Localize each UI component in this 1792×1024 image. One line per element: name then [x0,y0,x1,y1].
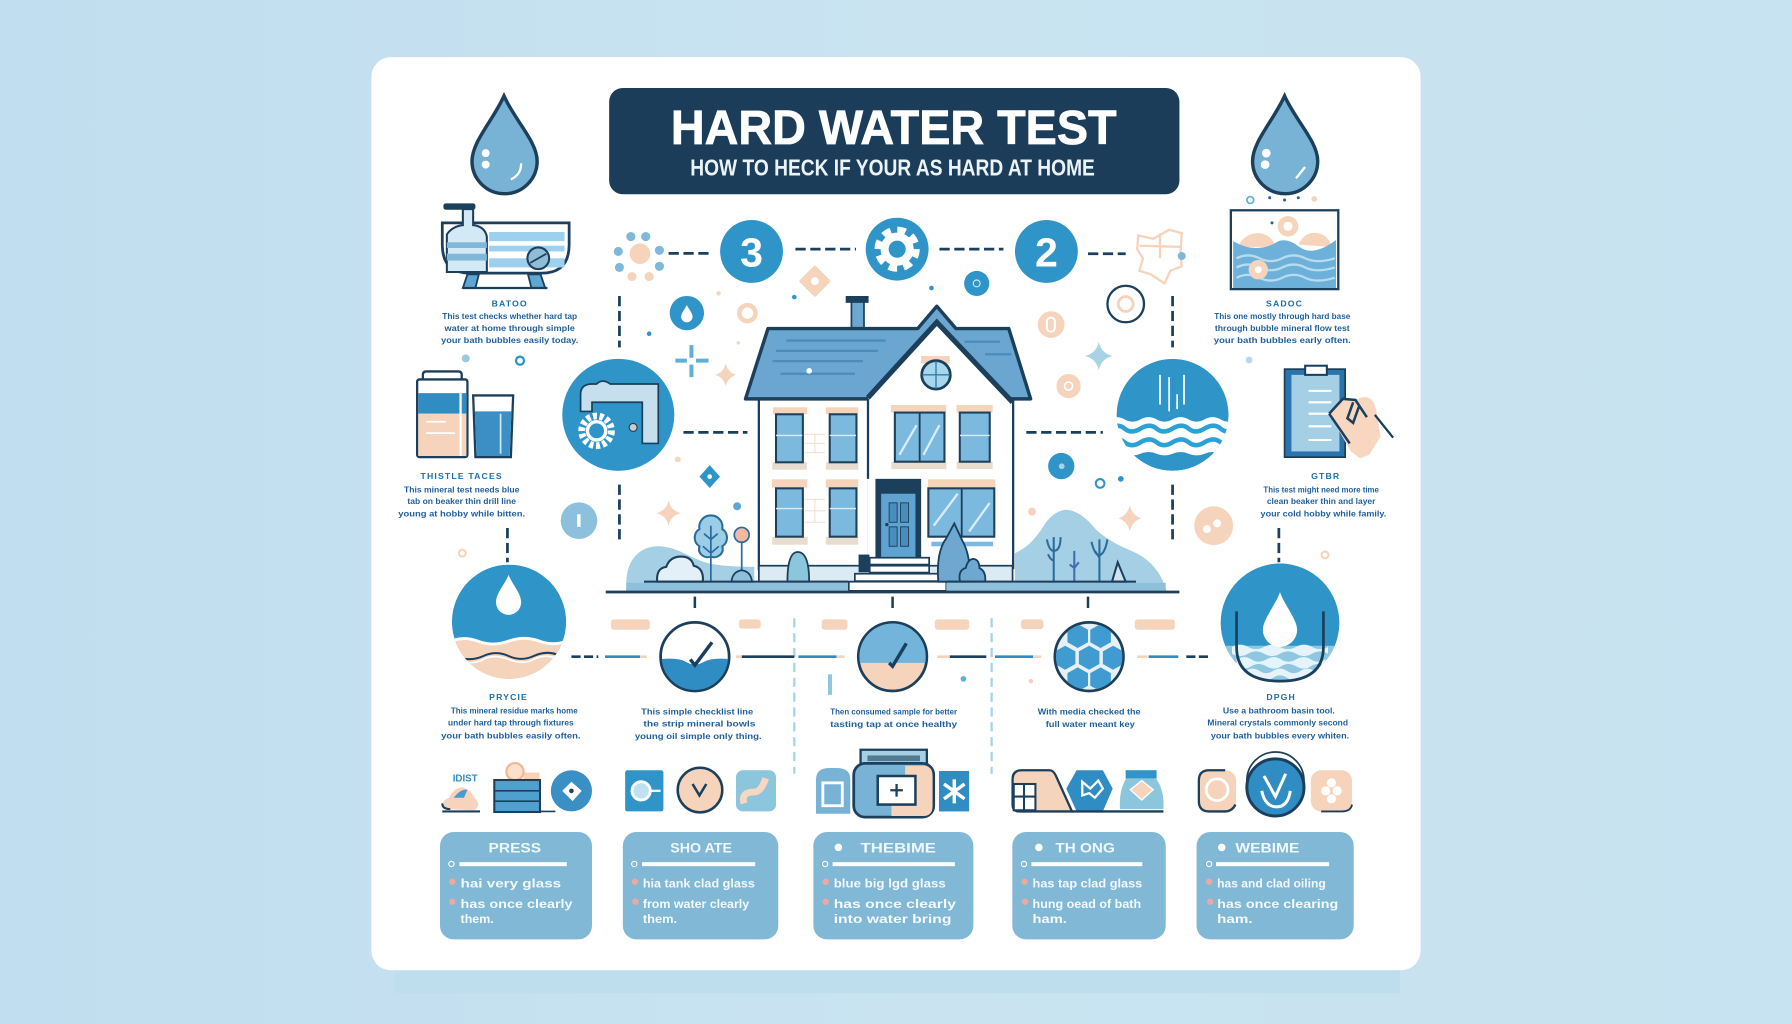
text block: step four: full water meant key [1046,719,1135,729]
icon: check dial half [857,622,928,691]
panel: card four: TH ONG [1055,841,1115,856]
card shadow strip [394,960,1400,993]
text block: middle right: GTBR [1311,471,1340,481]
connector: right vertical lower short [1278,528,1280,562]
icon: drop over peach wave circle [452,564,566,679]
text block: step four [1038,706,1141,729]
icon group: third [816,750,969,817]
tree [695,515,727,582]
foundation [759,566,1013,582]
text block: middle left [398,471,525,519]
text block: step one [441,692,581,740]
small bush [959,559,985,582]
panel: card five: WEBIME [1235,841,1299,856]
round window [921,356,950,363]
panel: card five: has and clad oiling [1217,876,1326,890]
shrub [787,552,809,582]
panel: card two: SHO ATE [670,841,732,856]
windows and sills [772,405,995,488]
text block: step one: This mineral residue marks home [451,706,578,716]
left hill [626,546,754,592]
text block: top right [1214,298,1351,345]
text block: middle right: clean beaker thin and layer [1267,496,1376,506]
text block: step two: the strip mineral bowls [643,718,756,728]
connector ticks under ground [695,597,1088,608]
panel: card three [813,832,973,939]
steps [849,555,946,591]
text block: step one: under hard tap through fixtures [448,718,574,728]
decorative dot right [1246,357,1253,363]
right hill [1015,510,1167,592]
number 3 badge [720,220,783,283]
panel: card two: them. [643,912,677,926]
text block: middle right [1261,471,1386,519]
panel: card two [623,832,778,939]
text block: middle left: THISTLE TACES [421,471,503,481]
text block: step two: young oil simple only thing. [635,731,762,741]
panel: card four: has tap clad glass [1033,876,1143,890]
icon: dot cluster [614,232,664,281]
icon: hex cell circle [1055,622,1123,691]
text block: step three [830,706,958,729]
text block: step five: your bath bubbles every whiten. [1211,730,1349,740]
text block: step five: Mineral crystals commonly second [1207,718,1348,728]
connector: vertical dashes beside house [619,296,1173,543]
icon: faucet and gear circle [562,359,674,471]
panel: card two: hia tank clad glass [643,876,755,890]
right garden plants [1047,537,1126,582]
icon: drop in water bowl circle [1218,563,1343,686]
connector: horizontal step lines [571,656,1211,658]
number 2 badge: 2 [1035,229,1058,275]
walls [759,395,869,569]
number 3 badge: 3 [740,229,763,275]
title: HARD WATER TEST [671,102,1117,155]
text block: step one: your bath bubbles easily often. [441,730,581,740]
text block: top right: SADOC [1266,298,1303,308]
connector: left vertical lower short [506,528,509,562]
icon: clipboard and hand [1285,366,1393,458]
panel: card five: ham. [1217,912,1253,926]
text block: step five: Use a bathroom basin tool. [1223,706,1335,716]
text block: top right: your bath bubbles early often. [1214,335,1351,345]
lollipop lamp [731,527,752,582]
panel: card one [440,832,592,939]
gable [868,322,1011,569]
icon group: second [625,768,776,812]
panel: card five [1197,832,1354,939]
text block: middle left: young at hobby while bitten. [398,509,525,519]
door [875,479,921,559]
decorative dots left [462,354,524,365]
panel: card four: ham. [1033,912,1067,926]
text block: top left: This test checks whether hard tap [442,311,577,321]
decorative dots above tank [1247,196,1317,203]
icon: water waves circle [1116,358,1228,471]
subtitle: HOW TO HECK IF YOUR AS HARD AT HOME [690,154,1095,180]
text block: middle right: your cold hobby while family. [1261,509,1386,519]
icon group: first [442,763,592,812]
text block: top left: BATOO [492,298,528,308]
main white card [371,57,1421,970]
icon group: fourth [1013,770,1164,811]
panel: card four: hung oead of bath [1033,897,1141,911]
icon: right water drop [1253,96,1318,194]
panel: card one: them. [461,912,494,926]
icon group: fifth [1198,752,1352,816]
panel: card two: from water clearly [643,897,749,911]
panel: card one: hai very glass [461,876,562,890]
panel: card one: has once clearly [461,897,573,911]
text block: top right: This one mostly through hard base [1214,311,1350,321]
text block: top left: your bath bubbles easily today. [441,335,578,345]
illustration: house [606,296,1179,592]
text block: middle left: tab on beaker thin drill line [407,496,516,506]
decorative icons around house, right [929,271,1233,545]
panel: card three: has once clearly [834,897,956,911]
number 2 badge [1015,220,1078,283]
gear badge [866,218,929,281]
text block: middle left: This mineral test needs blue [404,485,520,495]
icon: jar and glass [417,371,513,457]
icon: peach scroll [1137,230,1186,283]
decorative icons around house, left [647,267,829,526]
text block: step one: PRYCIE [489,692,528,702]
text block: top left: water at home through simple [444,323,575,333]
text block: step three: Then consumed sample for better [830,706,958,716]
icon: water tank panel [1231,210,1338,289]
text block: top left [441,298,578,345]
connector: light vertical dashes [459,550,1328,774]
ground lines [644,581,1136,583]
icon: left water drop [472,96,537,194]
panel: card three: into water bring [834,912,951,926]
text block: step two: This simple checklist line [641,706,753,716]
panel: card five: has once clearing [1217,897,1338,911]
panel: card one: PRESS [489,841,541,856]
chimney [851,301,864,333]
panel: card three: THEBIME [861,841,936,856]
text block: top right: through bubble mineral flow test [1215,323,1350,333]
panel: card four [1012,832,1166,939]
cone bush [938,523,970,582]
roof [745,306,1031,399]
brick details [805,434,825,522]
icon: bathtub [442,203,569,288]
text block: step three: tasting tap at once healthy [830,719,957,729]
text block: middle right: This test might need more time [1263,485,1379,495]
connector: top row dashes [669,249,1126,254]
bush left [657,557,703,582]
text block: step four: With media checked the [1038,706,1141,716]
text block: step five [1207,692,1349,740]
title banner [609,88,1179,194]
peach pill labels [611,619,1175,630]
text block: step two [635,706,762,741]
icon group: first: IDIST [453,774,478,785]
panel: card three: blue big lgd glass [834,876,946,890]
icon: check dial water [657,622,731,697]
small numeral badge [561,502,597,539]
text block: step five: DPGH [1266,692,1296,702]
